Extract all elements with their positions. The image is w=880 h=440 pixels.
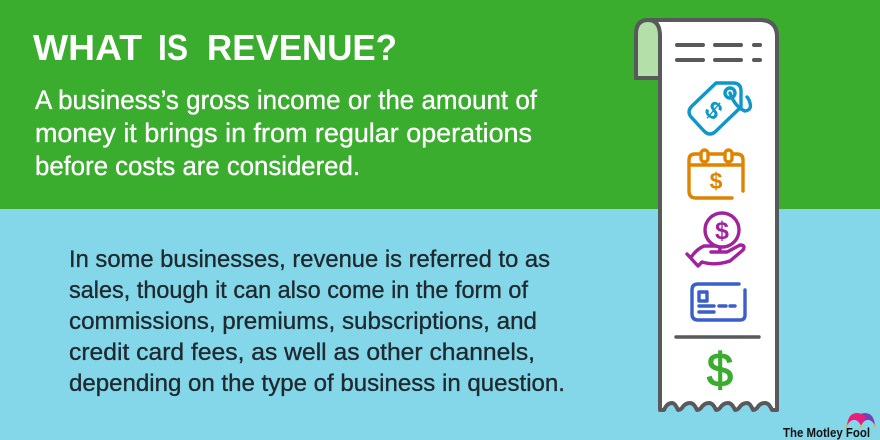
- title: [33, 27, 397, 68]
- icon: jester hat: [846, 413, 876, 427]
- text block: definition: money it brings in from regular operations: [35, 118, 532, 148]
- text block: definition: A business’s gross income or the amount of: [35, 85, 537, 115]
- text block: explanation: [69, 246, 565, 397]
- icon: price tag: $: [699, 96, 728, 126]
- panel: green header background: [0, 0, 880, 209]
- text block: definition: [35, 85, 537, 181]
- title: WHAT: [33, 27, 142, 68]
- icon: hand holding coin: $: [715, 217, 729, 245]
- icon: green dollar: $: [707, 343, 733, 396]
- text block: explanation: In some businesses, revenue is referred to as: [69, 246, 550, 273]
- logo wordmark: The Motley Fool: [783, 426, 870, 440]
- icon: calendar: [689, 150, 743, 198]
- title: IS: [158, 27, 188, 68]
- text block: explanation: depending on the type of business in question.: [69, 370, 565, 397]
- receipt header lines: [677, 45, 760, 60]
- divider: [676, 335, 759, 339]
- icon: hand holding coin: [687, 213, 744, 266]
- icon: calendar: $: [710, 168, 723, 194]
- logo: The Motley Fool: [783, 413, 876, 440]
- title: REVENUE?: [207, 27, 397, 68]
- icon: credit card: [692, 284, 745, 320]
- receipt illustration: [636, 20, 777, 410]
- receipt curled corner: [636, 20, 660, 78]
- text block: explanation: commissions, premiums, subscriptions, and: [69, 308, 537, 335]
- text block: definition: before costs are considered.: [35, 151, 360, 181]
- text block: explanation: credit card fees, as well as other channels,: [69, 339, 535, 366]
- panel: blue lower background: [0, 209, 880, 440]
- icon: price tag: [689, 83, 750, 134]
- text block: explanation: sales, though it can also come in the form of: [69, 277, 528, 304]
- receipt paper: [648, 20, 777, 410]
